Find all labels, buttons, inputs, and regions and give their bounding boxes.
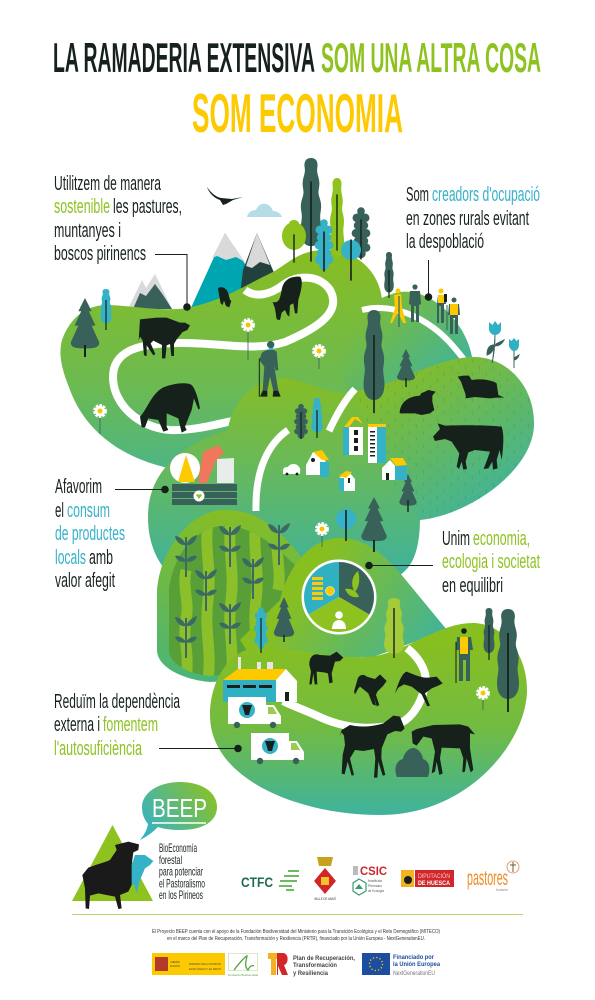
hill: crop field: [157, 510, 301, 682]
logo: Plan de Recuperación: Plan de Recuperación,: [293, 955, 355, 962]
road: upper right path: [362, 308, 466, 362]
callout: local products: valor afegit: [55, 570, 115, 592]
logo: sheep on triangle: [72, 825, 153, 909]
logo: Fundación Biodiversidad: [228, 954, 258, 977]
cow: big standing: [433, 423, 503, 470]
callout: local products: locals: [55, 547, 86, 569]
trees: near balance: [254, 597, 519, 712]
logo: CTFC: CTFC: [241, 874, 273, 890]
building: tall right: [368, 424, 386, 463]
funding text: en el marco del Plan de Recuperación, Transformación y Resiliencia (PRTR), financiado por la Unión Europea - NextGenerationEU.: [167, 936, 425, 942]
logo text: BioEconomía forestal: [159, 841, 205, 902]
logo: crest: VALLE DE ANSÓ: [314, 896, 336, 901]
factory: [223, 657, 297, 702]
callout: sustainable use: boscos pirinencs: [54, 243, 146, 265]
hill: right round: [338, 292, 480, 420]
callout: self-sufficiency: fomentem: [103, 714, 158, 736]
daisies: meadow: [95, 320, 324, 434]
callout: local products: el: [55, 500, 64, 522]
cow: standing left: [139, 318, 190, 358]
shepherd with staff: [259, 341, 281, 397]
hill: balance teardrop: [240, 538, 447, 660]
logo: CSIC: Pirenaico: [368, 883, 383, 888]
logo: Diputación de Huesca: [401, 870, 454, 887]
logo: Gobierno de España: ECOLÓGICA Y EL RETO: [189, 966, 222, 971]
truck: upper: [228, 697, 281, 728]
cows: resting and standing: [400, 376, 504, 470]
logo text: BioEconomía forestal: BioEconomía: [159, 841, 197, 855]
callout: jobs: Som: [406, 184, 429, 206]
logo: Gobierno de España: DE ESPAÑA: [170, 963, 180, 968]
logo: Diputación de Huesca: DIPUTACIÓN: [418, 873, 450, 880]
balance pie: economy, ecology, society: [303, 561, 375, 633]
callout: balance: en equilibri: [442, 575, 503, 597]
road: winding left path: [113, 278, 333, 430]
logo text: BioEconomía forestal: el Pastoralismo: [159, 876, 205, 890]
logo: CSIC: [353, 866, 387, 895]
callout: self-sufficiency: l'autosuficiència: [54, 738, 143, 760]
food crate: cheese, meat and milk: [170, 445, 237, 505]
callout: balance: economia,: [473, 528, 530, 550]
goat: right: [412, 724, 475, 775]
trees: right slope: [364, 252, 415, 413]
callout: local products: amb: [89, 547, 113, 569]
logo: Gobierno de España: GOBIERNO: [170, 960, 180, 964]
logo: Gobierno de España: MINISTERIO PARA LA TRANSICIÓN: [189, 961, 221, 966]
callout: local products: de productes: [55, 523, 125, 545]
logo: CSIC: Instituto: [368, 878, 383, 883]
hill: central town: [148, 378, 420, 575]
lamb: right: [395, 672, 443, 706]
hill: left meadow: [60, 250, 382, 473]
logo: Gobierno de España: [152, 953, 225, 975]
logo: EU flag and funding: [362, 953, 440, 977]
logo: Plan de Recuperación: y Resiliencia: [293, 970, 328, 977]
logo: CSIC: de Ecología: [368, 888, 385, 893]
callout: sustainable use: les pastures,: [113, 196, 182, 218]
logo text: BioEconomía forestal: en los Pirineos: [159, 888, 203, 902]
logo: Fundación Biodiversidad: Fundación Biodiversidad: [228, 973, 258, 977]
callout: local products: Afavorim: [55, 476, 102, 498]
funding text: El Proyecto BEEP cuenta con el apoyo de la Fundación Biodiversidad del Ministerio para la Transición Ecológica y el Reto Demográfico (MITECO): [152, 929, 440, 935]
callout: jobs: la despoblació: [406, 231, 484, 253]
logo: CSIC: CSIC: [360, 866, 387, 878]
person: hiker with backpack: [437, 288, 447, 323]
illustration: mountains: [128, 233, 275, 310]
trees: left meadow: [71, 289, 112, 357]
callout: self-sufficiency: Reduïm la dependència: [54, 691, 181, 713]
logo: EU flag and funding: Financiado por: [393, 954, 434, 961]
logo: Diputación de Huesca: DE HUESCA: [418, 881, 451, 887]
hill: bottom pasture: [210, 623, 527, 815]
tulips: [487, 321, 519, 368]
farmer in yellow vest: [456, 628, 473, 683]
callout: local products: [55, 476, 169, 592]
cow: upper head down: [273, 277, 302, 320]
workers group: [390, 284, 460, 334]
cow: lying right: [458, 376, 504, 398]
divider line: [72, 914, 523, 916]
callout: sustainable use: muntanyes i: [54, 220, 121, 242]
goat: left: [340, 716, 405, 778]
callout: self-sufficiency: externa i: [54, 714, 100, 736]
logo: BEEP speech bubble: [140, 782, 217, 840]
logo: CTFC: [241, 871, 299, 890]
house: small: [306, 450, 329, 477]
building: tall left: [343, 417, 363, 455]
logo: EU flag and funding: NextGenerationEU: [393, 971, 435, 977]
hill: right cows: [355, 357, 534, 520]
person: yellow vest: [447, 298, 460, 334]
logo: crest: [314, 857, 336, 901]
bush: [395, 748, 429, 777]
cow: grazing lower: [140, 383, 200, 433]
title: [53, 34, 541, 144]
person: man standing: [409, 284, 421, 322]
car: [283, 464, 300, 475]
funding text: [152, 929, 440, 942]
logo: Plan de Recuperación: Transformación: [293, 962, 337, 969]
cloud: [247, 204, 282, 217]
lamb: left: [309, 652, 343, 684]
truck: lower: [251, 733, 304, 764]
trees: town: [294, 398, 417, 552]
house: lower: [339, 471, 355, 491]
trees: top forest: [282, 158, 370, 280]
callout: sustainable use: sostenible: [54, 196, 110, 218]
house: right: [382, 458, 407, 480]
logo: Plan de Recuperación: [268, 953, 355, 977]
callout: balance: [365, 528, 540, 597]
callout: local products: consum: [67, 500, 110, 522]
daisy: bottom pasture: [478, 688, 488, 710]
road: bottom path: [283, 648, 426, 728]
logo: pastores: [467, 861, 519, 892]
callout: balance: Unim: [442, 528, 470, 550]
logo text: BioEconomía forestal: forestal: [159, 853, 182, 867]
cow: lying left: [400, 390, 436, 415]
logo text: BioEconomía forestal: para potenciar: [159, 864, 203, 878]
callout: self-sufficiency: [54, 691, 242, 760]
lamb: middle: [354, 674, 387, 706]
road: central path: [256, 389, 355, 511]
callout: sustainable use: Utilitzem de manera: [54, 173, 162, 195]
logo: pastores: fundación: [496, 888, 508, 892]
sheep: two big goats: [340, 716, 475, 778]
cow: small grazing: [218, 287, 231, 307]
logo: BEEP speech bubble: BEEP: [152, 793, 207, 823]
sheep: three lambs: [309, 652, 443, 706]
logo: EU flag and funding: la Unión Europea: [393, 961, 440, 968]
callout: jobs: [406, 184, 540, 301]
logo: pastores: pastores: [467, 867, 508, 890]
bird: [207, 187, 243, 205]
person: hiker in yellow: [390, 288, 406, 327]
village buildings: [283, 417, 407, 491]
callout: sustainable use: [54, 173, 191, 311]
